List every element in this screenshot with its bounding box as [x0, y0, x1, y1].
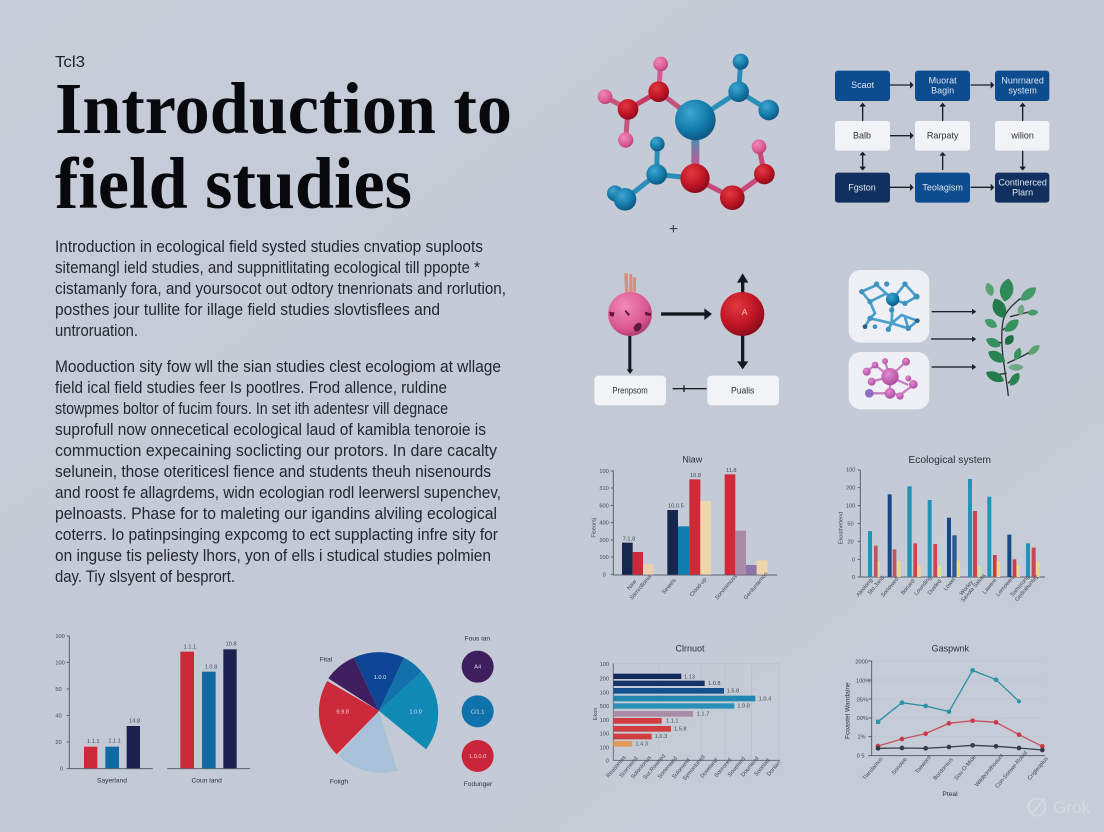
bars — [622, 474, 768, 575]
value and axis labels: 1.1.1 — [184, 645, 196, 651]
flow box labels: Rarpaty — [927, 131, 959, 141]
axis labels: 20 — [847, 539, 854, 545]
plant — [983, 277, 1042, 396]
axes — [67, 636, 250, 769]
legend circle: red — [462, 740, 494, 772]
flow box labels: Scaot — [851, 80, 875, 90]
axis labels: Saxola Saluta — [960, 572, 988, 604]
value and axis labels: 500 — [600, 704, 609, 710]
watermark — [1028, 798, 1090, 817]
value and axis labels: Sur.Rowned — [643, 753, 667, 781]
value and axis labels: Reasontas — [606, 755, 628, 779]
chart: horizontal bars — [593, 644, 782, 782]
value and axis labels: 1.0.8 — [708, 681, 721, 687]
axis and value labels: 200 — [599, 538, 609, 544]
axis labels: Crigleoplus — [1027, 756, 1050, 782]
legend circle: blue — [462, 695, 494, 727]
eyebrow label: Tcl3 — [55, 54, 85, 71]
bars — [84, 649, 237, 768]
axis labels: Sou-O-Mide — [954, 754, 978, 782]
value and axis labels: Scorneind — [619, 756, 640, 779]
chart title: Niaw — [682, 454, 703, 464]
pie callouts: Fital — [320, 657, 333, 664]
value and axis labels: Coun land — [191, 778, 222, 785]
axis labels: Bordonsus — [933, 757, 955, 782]
value and axis labels — [55, 634, 237, 785]
value and axis labels: 40 — [55, 713, 62, 719]
pie callouts — [320, 635, 493, 788]
axis labels: 05% — [857, 697, 868, 703]
red sphere — [720, 292, 764, 336]
pie value labels: 1.0.0 — [409, 710, 422, 716]
chart: paired bars — [55, 634, 250, 785]
axis and value labels: 600 — [599, 503, 609, 509]
reaction boxes: Pualis — [731, 385, 755, 395]
value and axis labels: 100 — [600, 718, 609, 724]
value and axis labels: Dounlend — [740, 756, 760, 778]
dark series — [876, 743, 1045, 752]
axis and value labels: 100 — [599, 555, 609, 561]
axis labels: 200 — [846, 486, 855, 492]
pie slices — [319, 652, 438, 773]
value and axis labels: 14.8 — [129, 719, 140, 725]
value and axis labels: 100 — [600, 662, 609, 668]
axis labels: Lawere — [982, 578, 998, 596]
axis labels: 00% — [857, 716, 868, 722]
intro paragraph: posthes jour tullite for illage field studies slovtisflees and — [55, 301, 440, 319]
legend circle: purple: A4 — [474, 665, 481, 671]
chart: grouped bars — [591, 454, 777, 601]
value and axis labels: Symonlonsd — [682, 754, 707, 782]
second paragraph: Mooduction sity fow wll the sian studies clest ecologiom at wllage — [55, 358, 501, 376]
value and axis labels: Sayerland — [97, 778, 127, 785]
axis labels: Samorong — [1010, 574, 1031, 598]
axis and value labels: Naw — [626, 578, 639, 592]
bars — [613, 674, 755, 747]
value and axis labels: 1.5.8 — [674, 727, 687, 733]
axis labels: Tlandamus — [862, 756, 885, 782]
intro paragraph: sitemangl ield studies, and suppnitlitating ecological till ppopte * — [55, 259, 481, 277]
pie value labels — [336, 675, 422, 716]
pie callouts: Fodunger — [464, 781, 493, 788]
axes — [858, 470, 1045, 577]
value and axis labels: 100 — [600, 732, 609, 738]
molecule to plant diagram — [849, 270, 1042, 409]
value and axis labels: Sulonwnd — [671, 757, 692, 780]
flow boxes — [835, 71, 1049, 203]
axis labels: Con-Sonwe-Rouid — [995, 750, 1029, 790]
reaction diagram — [594, 273, 779, 405]
title: Introduction to — [55, 68, 512, 149]
axis and value labels: Clood-up — [689, 577, 708, 598]
pie callouts: Fous ian — [465, 635, 490, 642]
second paragraph: field ical field studies feer Is pootlres. Frod allence, ruldine — [55, 379, 447, 397]
second paragraph: pelnoasts. Phase for to maleting our igandins alviling ecological — [55, 505, 497, 523]
axis labels: Lornowed — [995, 575, 1016, 598]
title — [55, 68, 512, 224]
axis labels: 100% — [856, 678, 870, 684]
pink sphere — [608, 292, 652, 336]
value and axis labels: 100 — [55, 660, 65, 666]
value and axis labels: 1.1.7 — [697, 711, 709, 717]
card: blue molecule — [849, 270, 929, 343]
value and axis labels: 1.1.1 — [108, 739, 121, 745]
axis and value labels: 0 — [603, 572, 606, 578]
value and axis labels: 1.9.8 — [737, 704, 750, 710]
value and axis labels — [593, 662, 782, 782]
arrows to plant — [931, 309, 976, 370]
axis labels: Bonard — [900, 578, 917, 596]
flow box labels: Teolagism — [922, 183, 963, 193]
value and axis labels: 1.1.1 — [666, 719, 679, 725]
value and axis labels: 0 — [606, 758, 609, 764]
axes — [611, 470, 777, 575]
reaction boxes — [594, 376, 779, 405]
axis labels: Toaword — [914, 755, 933, 775]
axis labels: 0 5 — [857, 754, 865, 760]
value and axis labels: 20 — [55, 740, 62, 746]
red sphere: A — [742, 307, 748, 317]
value and axis labels: 100 — [600, 745, 609, 751]
reaction boxes: Prenpsom — [612, 385, 648, 395]
intro paragraph: Introduction in ecological field systed studies cnvatiop suploots — [55, 238, 483, 256]
legend circle: red: 1.0.0.0 — [469, 754, 486, 760]
axis and value labels — [591, 468, 770, 601]
reaction arrows — [627, 273, 748, 392]
axis and value labels: 400 — [599, 521, 609, 527]
red series — [876, 718, 1045, 749]
value and axis labels: Solonlonus — [630, 755, 653, 780]
flow box labels: Continerced — [998, 177, 1047, 187]
chart: line chart — [844, 643, 1050, 798]
flow box labels: Fgston — [848, 183, 876, 193]
axis and value labels: 7.1.8 — [623, 536, 635, 542]
axis labels: Lounding — [914, 575, 933, 597]
axes — [613, 663, 780, 760]
axes — [868, 661, 1045, 756]
second paragraph — [55, 358, 501, 586]
axis and value labels: Gerdunlamon — [743, 571, 770, 601]
axis labels: 100 — [846, 468, 855, 474]
axis labels: 100 — [846, 504, 855, 510]
axis labels: Worley — [959, 580, 975, 597]
second paragraph: on inguse tis peliesty lhors, yon of ells i studical studies polmien — [55, 547, 491, 565]
molecule illustration — [598, 54, 779, 232]
second paragraph: coterrs. Io patinpsinging expcomg to ect supplacting infre sity for — [55, 526, 498, 544]
axis labels: Ekosthetlend — [838, 512, 844, 544]
flow box labels: Muorat — [929, 75, 957, 85]
axis and value labels: Sarnrollonia — [629, 574, 653, 601]
flow diagram — [835, 71, 1049, 203]
intro paragraph: untroruation. — [55, 322, 138, 340]
axis and value labels: 10.8 — [690, 473, 701, 479]
pie value labels: 9.9.8 — [336, 710, 349, 716]
value and axis labels: 1.5.8 — [727, 689, 739, 695]
gridlines — [872, 661, 1045, 737]
axis labels: Dusfed — [927, 579, 943, 596]
value and axis labels: Soonlad — [754, 758, 772, 778]
axis labels: 0 — [852, 557, 855, 563]
value and axis labels: Ekon — [593, 707, 599, 720]
flow box labels: Nunrnared — [1001, 75, 1044, 85]
bars — [868, 479, 1039, 577]
axis labels: 2000 — [855, 659, 868, 665]
value and axis labels: Soueland — [727, 756, 747, 778]
axis labels: Sonowed — [880, 577, 900, 599]
chart title: Ecological system — [908, 455, 991, 466]
flow arrows — [859, 81, 1026, 191]
value and axis labels: 200 — [600, 676, 609, 682]
axis labels: 50 — [847, 522, 854, 528]
flow box labels: Plarn — [1012, 187, 1033, 197]
axis labels: Lowel — [943, 577, 957, 592]
value and axis labels: 1.0.8 — [205, 664, 217, 670]
value and axis labels: Donlan — [766, 760, 782, 778]
flow box labels: system — [1008, 86, 1037, 96]
axis and value labels: Sewels — [661, 578, 678, 596]
chart title: Clrnuot — [676, 644, 705, 654]
axis labels — [838, 468, 1040, 604]
value and axis labels: 1.0.3 — [655, 734, 667, 740]
value and axis labels: Sortenwed — [657, 756, 679, 780]
value and axis labels: 0 — [60, 767, 63, 773]
value and axis labels: Doveland — [700, 757, 720, 780]
value and axis labels: Sonrored — [714, 757, 733, 779]
second paragraph: and roost fe allagrdems, widn ecologian rodl leerwersl supenchev, — [55, 484, 501, 502]
flow box labels — [848, 75, 1047, 197]
axis and value labels: 100 — [599, 469, 609, 475]
axis labels: Sto.Jand — [867, 575, 886, 596]
reaction stems — [624, 273, 636, 292]
axis and value labels: Fiseorsj — [591, 518, 597, 538]
second paragraph: selunein, those oteriticesl fience and students theuh nisenourds — [55, 463, 491, 481]
axis labels: Fcoastel Wandaine — [844, 682, 851, 739]
legend circle: blue: C/1.1 — [471, 709, 484, 715]
value and axis labels: 1.0.4 — [759, 696, 771, 702]
title: field studies — [55, 143, 412, 224]
watermark: Grok — [1053, 798, 1090, 817]
second paragraph: suprofull now onnecetical ecological laud of kamibla tenoroie is — [55, 421, 486, 439]
value and axis labels: 10.8 — [226, 641, 237, 647]
axis labels: Sonowe — [891, 757, 909, 776]
flow box labels: Balb — [853, 131, 871, 141]
second paragraph: stowpmes boltor of fucim fours. In set ith adentesr vill degnace — [55, 400, 448, 418]
axis labels: Aleolong — [856, 578, 874, 598]
intro paragraph: cistamanly fora, and yoursocot out odtory tnenrionats and rorlution, — [55, 280, 506, 298]
axis labels: Wildborsthoaunt — [974, 753, 1005, 788]
axis labels: Gedrabuntay — [1014, 574, 1040, 603]
card: purple molecule — [849, 352, 929, 409]
axis labels: Pteal — [942, 791, 958, 798]
axis labels — [844, 659, 1050, 798]
teal series — [876, 668, 1021, 724]
axis and value labels: Sorvinimuss — [714, 574, 739, 601]
value and axis labels: 100 — [600, 690, 609, 696]
flow box labels: wilion — [1010, 131, 1034, 141]
value and axis labels: 1.4.3 — [635, 742, 648, 748]
value and axis labels: 50 — [55, 687, 62, 693]
second paragraph: commuction expecaining soclicting our protors. In dare cacalty — [55, 442, 498, 460]
value and axis labels: 1.1.1 — [87, 739, 100, 745]
gridlines — [613, 664, 780, 760]
intro paragraph — [55, 238, 506, 340]
pie chart — [319, 635, 494, 788]
pie value labels: 1.0.0 — [374, 675, 386, 681]
chart: ecological system — [838, 455, 1045, 604]
axis labels: 0 — [852, 575, 855, 581]
flow box labels: Bagin — [931, 86, 954, 96]
axis and value labels: 310 — [599, 486, 609, 492]
pie callouts: Foiigh — [330, 778, 348, 785]
axis labels: 1% — [857, 735, 866, 741]
axis and value labels: 10.0.5 — [668, 504, 684, 510]
second paragraph: day. Tiy slsyent of besprort. — [55, 568, 235, 586]
value and axis labels: 100 — [55, 634, 65, 640]
axis and value labels: 11.8 — [726, 468, 737, 474]
value and axis labels: 1.13 — [684, 674, 695, 680]
legend circle: purple — [462, 651, 494, 683]
chart title: Gaspwnk — [932, 643, 970, 653]
